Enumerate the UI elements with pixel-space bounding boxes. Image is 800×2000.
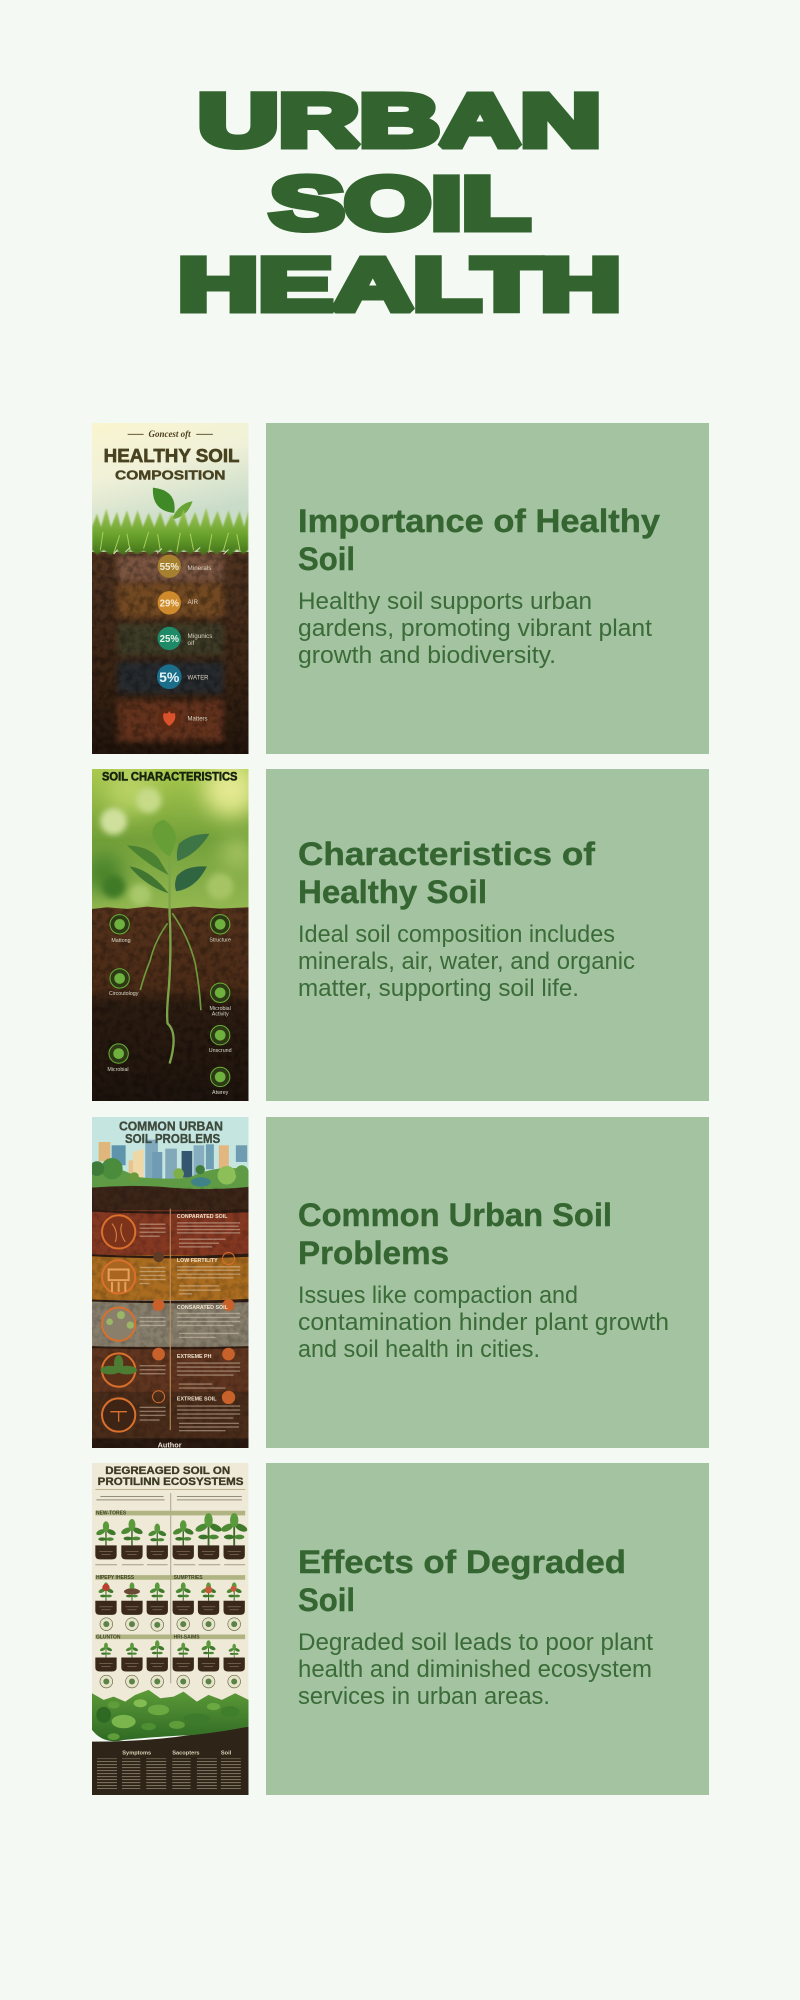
thumbnail heading: healthy soil composition: COMPOSITION	[115, 468, 226, 483]
plants row three	[95, 1640, 245, 1672]
image: healthy soil composition	[92, 423, 248, 754]
trees and park	[90, 1158, 248, 1190]
icons row two	[100, 1675, 241, 1688]
panel body text: and soil health in cities.	[298, 1336, 540, 1363]
bottom columns: Sacopters	[172, 1750, 200, 1756]
stat: 29% air	[158, 591, 199, 614]
panel body text: Ideal soil composition includes	[298, 921, 615, 948]
icon group: right soil traits: Activity	[212, 1011, 229, 1017]
panel heading	[298, 503, 660, 577]
stat: 55% minerals	[158, 555, 211, 578]
icon group: left soil traits: Microbial	[107, 1067, 129, 1073]
city skyline	[99, 1140, 247, 1180]
panel body text: services in urban areas.	[298, 1683, 550, 1710]
panel heading: Characteristics of	[298, 836, 595, 872]
panel heading: Soil	[298, 1582, 355, 1618]
right column headings: LOW FERTILITY	[177, 1258, 218, 1264]
icon group: left soil traits	[107, 915, 139, 1073]
panel body text: health and diminished ecosystem	[298, 1656, 652, 1683]
bottom soil	[92, 1727, 248, 1795]
title: URBAN	[198, 79, 601, 162]
panel heading	[298, 1544, 626, 1618]
icons row one	[100, 1618, 241, 1631]
section bands: HIPEPY IHERSS	[96, 1575, 135, 1581]
panel: common urban soil problems	[266, 1117, 709, 1448]
icon group: right soil traits	[209, 915, 232, 1096]
panel heading: Common Urban Soil	[298, 1197, 612, 1233]
panel body text: matter, supporting soil life.	[298, 975, 579, 1002]
thumbnail heading: common urban soil problems	[119, 1119, 223, 1146]
soil ground	[92, 907, 248, 1101]
thumbnail heading: degraded soil	[95, 1465, 245, 1490]
panel: effects of degraded soil	[266, 1463, 709, 1795]
title	[178, 79, 621, 326]
soil layers	[118, 555, 224, 742]
author mark: Author	[158, 1440, 182, 1449]
stat: 25% organics: Migunics	[188, 633, 212, 640]
icon: leaf sprout	[153, 488, 193, 520]
grass	[92, 508, 248, 556]
stat: matters: Matters	[188, 716, 208, 722]
thumbnail heading: degraded soil: PROTILINN ECOSYSTEMS	[98, 1476, 244, 1488]
image: soil characteristics	[92, 769, 248, 1101]
panel body text	[298, 921, 635, 1002]
stat: 25% organics: 25%	[160, 634, 179, 645]
stat: 5% water: WATER	[188, 676, 209, 682]
icon group: right soil traits: Microbial	[210, 1006, 231, 1012]
stat: 5% water: 5%	[159, 669, 180, 685]
section bands: GLUNTON	[96, 1635, 121, 1641]
panel heading	[298, 1197, 612, 1271]
section bands	[95, 1511, 245, 1641]
panel body text	[298, 588, 652, 669]
strata texture	[92, 1188, 248, 1448]
title: HEALTH	[178, 243, 621, 326]
icon group: right soil traits: Atwrey	[212, 1090, 229, 1096]
panel heading: Effects of Degraded	[298, 1544, 626, 1580]
stat: 29% air: AIR	[188, 599, 199, 606]
soil texture	[92, 554, 248, 754]
right column headings: CONSARATED SOIL	[177, 1305, 229, 1311]
centre divider	[169, 1493, 172, 1683]
panel body text	[298, 1282, 669, 1363]
plants row one	[95, 1513, 248, 1565]
bottom foliage	[92, 1690, 248, 1741]
right column headings: EXTREME SOIL	[177, 1397, 217, 1403]
icon group: left soil traits: Circoutology	[109, 991, 139, 997]
stat: 25% organics	[158, 627, 212, 650]
bottom columns	[97, 1750, 241, 1789]
stat: matters	[158, 707, 208, 730]
icon group: right soil traits: Structure	[209, 938, 231, 944]
panel heading	[298, 836, 595, 910]
right column headings	[177, 1214, 229, 1403]
panel body text: Degraded soil leads to poor plant	[298, 1629, 653, 1656]
icon: seedling with roots	[127, 820, 210, 1064]
panel body text	[298, 1629, 653, 1710]
soil strata	[92, 1186, 248, 1448]
image: degraded soil on ecosystems	[92, 1463, 248, 1795]
panel body text: growth and biodiversity.	[298, 642, 556, 669]
stat: 25% organics: oif	[188, 640, 194, 647]
panel: importance of healthy soil	[266, 423, 709, 754]
title: SOIL	[270, 162, 530, 245]
intro text lines	[96, 1496, 242, 1500]
section bands: NEW-TORES	[96, 1511, 127, 1517]
icon circles: problem symbols	[100, 1215, 235, 1432]
thumbnail heading: common urban soil problems: COMMON URBAN	[119, 1119, 223, 1133]
thumbnail heading: healthy soil composition: Goncest oft	[148, 429, 191, 439]
stat: 55% minerals: 55%	[160, 562, 179, 573]
panel body text: contamination hinder plant growth	[298, 1309, 669, 1336]
thumbnail heading: soil characteristics: SOIL CHARACTERISTICS	[102, 769, 238, 783]
panel body text: minerals, air, water, and organic	[298, 948, 635, 975]
section bands: HRI-SAIMS	[174, 1635, 200, 1641]
panel heading: Healthy Soil	[298, 874, 487, 910]
centre divider line	[169, 1209, 172, 1430]
stat: 29% air: 29%	[160, 598, 179, 609]
plants row two	[95, 1582, 245, 1615]
icon group: left soil traits: Mattong	[111, 938, 131, 944]
thumbnail heading: degraded soil: DEGREAGED SOIL ON	[105, 1465, 230, 1477]
right column headings: CONPARATED SOIL	[177, 1214, 228, 1220]
panel heading: Problems	[298, 1235, 449, 1271]
text lines	[140, 1222, 240, 1431]
panel: characteristics of healthy soil	[266, 769, 709, 1101]
stat: 55% minerals: Minerals	[188, 565, 211, 572]
panel body text: Issues like compaction and	[298, 1282, 578, 1309]
right column headings: EXTREME PH	[177, 1354, 212, 1360]
bottom columns: Soil	[221, 1750, 232, 1756]
icon group: right soil traits: Unscrund	[209, 1048, 232, 1054]
panel body text: Healthy soil supports urban	[298, 588, 592, 615]
bottom columns: Symptoms	[122, 1750, 151, 1756]
panel heading: Importance of Healthy	[298, 503, 660, 539]
thumbnail heading: healthy soil composition: HEALTHY SOIL	[104, 445, 240, 466]
soil texture	[92, 909, 248, 1101]
panel body text: gardens, promoting vibrant plant	[298, 615, 652, 642]
panel heading: Soil	[298, 541, 355, 577]
section bands: SUMPTRIES	[174, 1575, 203, 1581]
background bokeh	[84, 763, 257, 906]
thumbnail heading: common urban soil problems: SOIL PROBLEMS	[125, 1132, 220, 1146]
soil ground	[92, 552, 248, 754]
stat: 5% water	[157, 664, 209, 689]
image: common urban soil problems	[92, 1117, 248, 1449]
thumbnail heading: healthy soil composition	[104, 429, 240, 483]
